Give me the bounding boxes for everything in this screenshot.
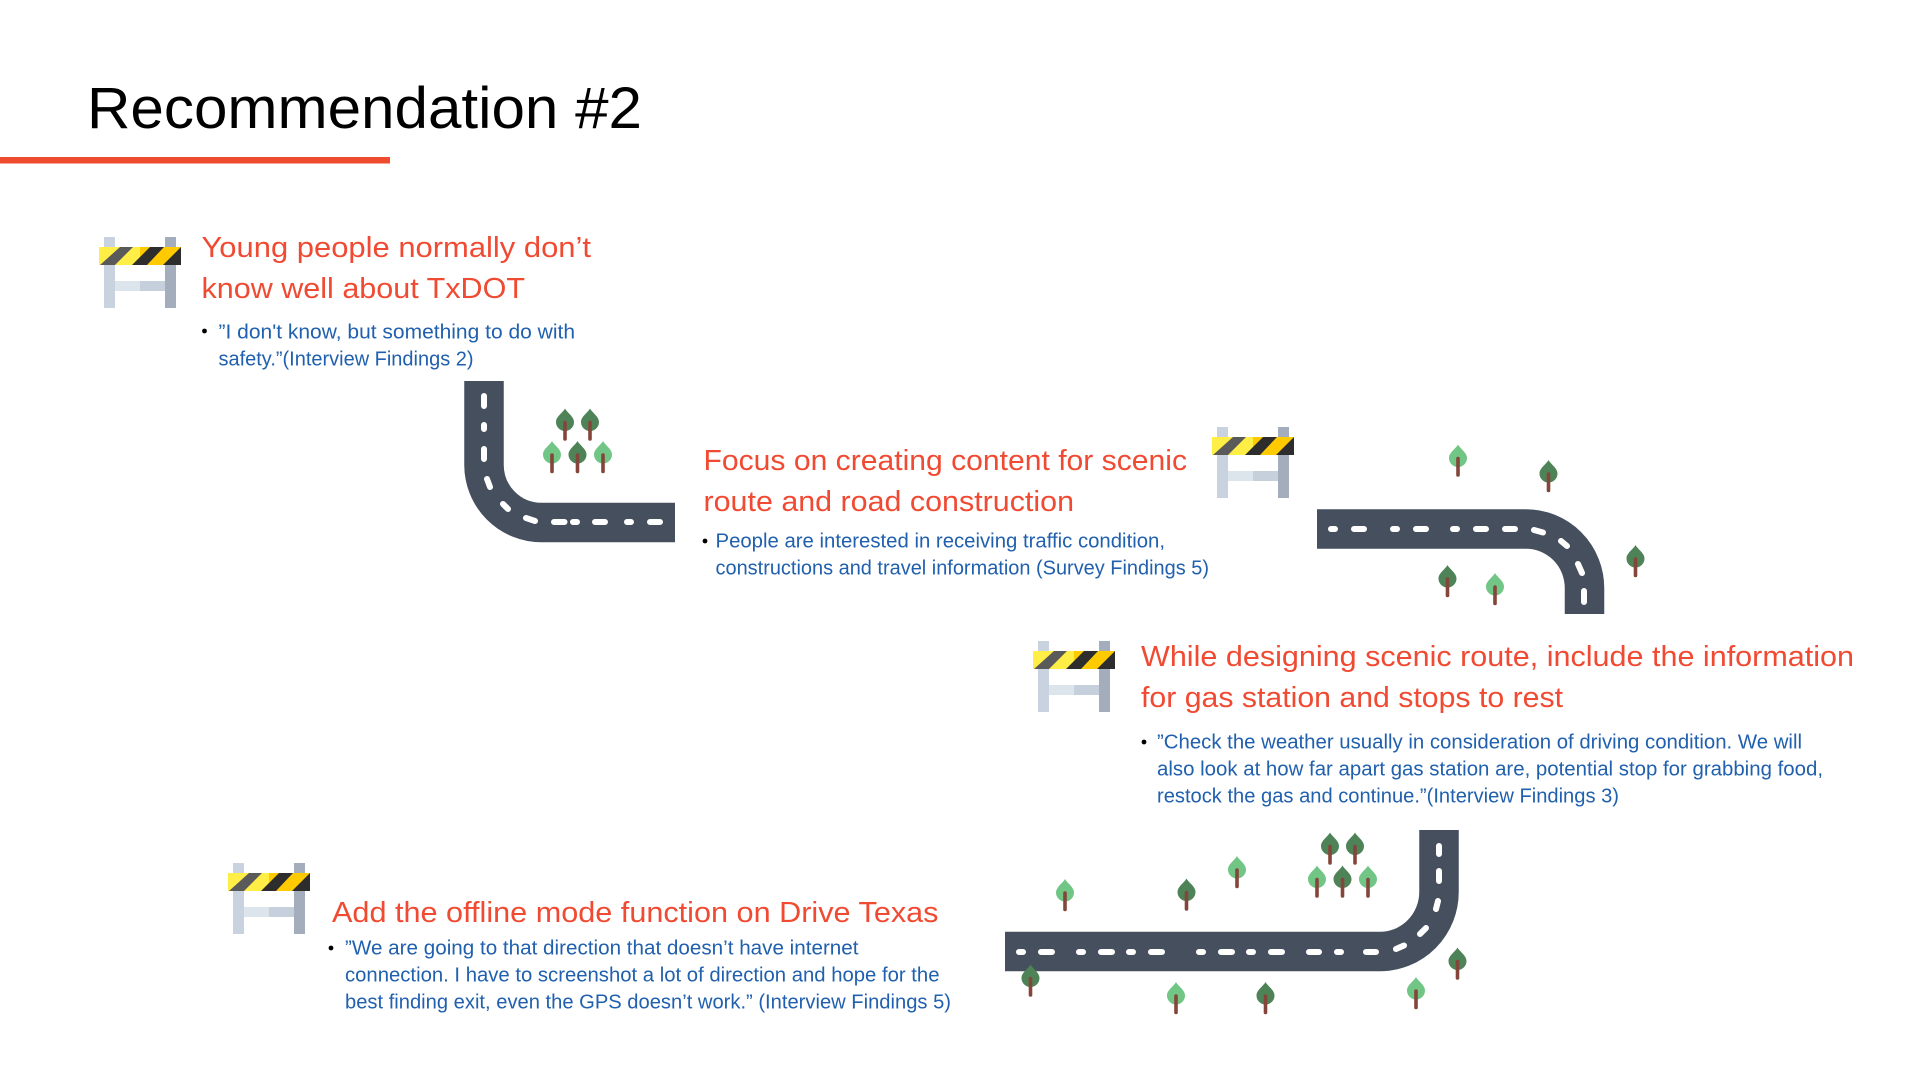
quote: interview findings 3: also look at how far apart gas station are, potential stop for grabbing food, [1157, 758, 1823, 780]
road segment 2 [1317, 529, 1584, 614]
heading: young people [202, 232, 591, 305]
panel: focus on content [703, 427, 1294, 580]
trees around road 3 [1022, 832, 1466, 1012]
quote: interview findings 5 [329, 938, 951, 1014]
panel: scenic route info [1033, 641, 1854, 808]
road segment 1 [484, 381, 675, 522]
quote: interview findings 3 [1142, 732, 1823, 808]
quote: interview findings 3: restock the gas and continue.”(Interview Findings 3) [1157, 786, 1619, 808]
lane dashes 3 [1019, 846, 1439, 952]
quote: interview findings 5: connection. I have to screenshot a lot of direction and hope for the [345, 964, 940, 986]
panel: young people [99, 232, 591, 370]
heading: focus on content: route and road construction [704, 486, 1074, 518]
survey finding 5: constructions and travel information (Survey Findings 5) [716, 558, 1209, 580]
heading: scenic route info: While designing scenic route, include the information [1141, 641, 1854, 673]
heading: focus on content: Focus on creating content for scenic [704, 445, 1187, 477]
icon: road barrier [99, 237, 181, 308]
title: Recommendation #2 [87, 76, 642, 141]
trees around road 2 [1438, 444, 1644, 604]
survey finding 5: People are interested in receiving traffic condition, [716, 530, 1165, 552]
trees cluster 1 [543, 408, 612, 472]
quote: interview findings 2: ”I don't know, but something to do with [218, 322, 575, 344]
heading: young people: Young people normally don’t [202, 232, 591, 264]
quote: interview findings 2: safety.”(Interview Findings 2) [218, 348, 474, 370]
icon: road barrier [228, 863, 310, 934]
heading: focus on content [704, 445, 1187, 518]
quote: interview findings 5: ”We are going to that direction that doesn’t have internet [345, 938, 859, 960]
title underline [0, 157, 390, 164]
lane dashes 1 [484, 396, 660, 522]
road 3 with trees [1005, 830, 1466, 1012]
quote: interview findings 3: ”Check the weather usually in consideration of driving condition. We will [1157, 732, 1802, 754]
road 1 with trees [484, 381, 675, 522]
road 2 with trees [1317, 444, 1644, 614]
quote: interview findings 2 [202, 322, 575, 370]
heading: scenic route info: for gas station and stops to rest [1141, 682, 1563, 714]
panel: offline mode [228, 863, 951, 1014]
survey finding 5 [703, 530, 1209, 580]
lane dashes 2 [1331, 529, 1584, 602]
icon: road barrier [1212, 427, 1294, 498]
quote: interview findings 5: best finding exit, even the GPS doesn’t work.” (Interview Findings 5) [345, 992, 951, 1014]
road segment 3 [1005, 830, 1439, 952]
heading: young people: know well about TxDOT [202, 273, 525, 305]
heading: offline mode: Add the offline mode function on Drive Texas [332, 897, 938, 929]
icon: road barrier [1033, 641, 1115, 712]
heading: scenic route info [1141, 641, 1854, 714]
